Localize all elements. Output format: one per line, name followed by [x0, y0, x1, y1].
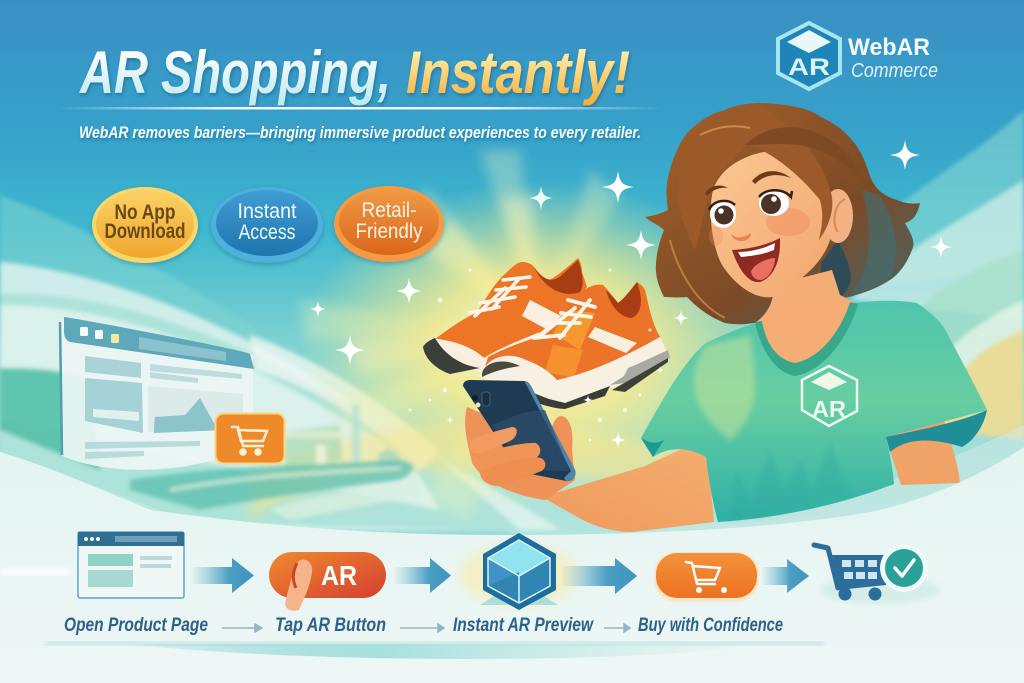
arrow	[562, 558, 637, 594]
cart tile icon	[216, 414, 284, 464]
badge: instant access	[211, 187, 323, 263]
light rays and glow	[250, 150, 780, 520]
sleeve inside	[886, 410, 987, 452]
page body	[61, 319, 253, 470]
step labels: Open Product Page	[64, 615, 208, 636]
t-shirt	[641, 301, 987, 522]
brand logo	[778, 23, 938, 89]
step labels: Buy with Confidence	[638, 615, 783, 636]
page content blocks	[85, 356, 243, 459]
arrow	[192, 558, 254, 593]
address bar	[139, 337, 226, 361]
white lower panel	[0, 447, 1024, 683]
step labels: Instant AR Preview	[453, 615, 594, 636]
hair front	[678, 103, 832, 250]
logo wordmark: WebAR	[848, 34, 930, 61]
title underline	[55, 107, 665, 110]
logo subline: Commerce	[851, 60, 938, 82]
right eye	[759, 190, 792, 216]
small step arrows	[222, 624, 630, 632]
page header bar	[64, 317, 254, 369]
character: excited woman	[542, 103, 987, 532]
city scene behind page	[130, 405, 420, 520]
cheek blush	[766, 208, 810, 236]
step 4 icon: cart button	[654, 552, 759, 602]
back sneaker	[423, 258, 587, 374]
left eyebrow	[705, 186, 728, 196]
step 1 icon: browser	[78, 532, 184, 598]
badge: instant access: Access	[238, 221, 296, 244]
nose	[731, 233, 751, 241]
window dots	[80, 327, 119, 343]
shirt collar	[755, 302, 858, 376]
logo hexagon: AR	[788, 54, 830, 81]
mouth	[732, 238, 780, 282]
neck and chest	[752, 270, 860, 380]
hair dark underside	[821, 240, 851, 300]
badge: retail-friendly: Retail-	[362, 199, 417, 222]
left eye	[709, 200, 736, 228]
badge: retail-friendly: Friendly	[356, 220, 423, 243]
shirt AR logo	[802, 366, 857, 426]
webpage mockup illustration	[60, 317, 254, 470]
left forearm	[542, 438, 714, 532]
right eyebrow	[752, 171, 791, 184]
right arm	[886, 417, 960, 485]
smartphone	[463, 380, 575, 481]
front sneaker	[480, 282, 670, 409]
shirt AR logo: AR	[812, 396, 846, 422]
logo hexagon	[778, 23, 840, 89]
main title: Instantly!	[406, 39, 630, 106]
step labels: Tap AR Button	[275, 615, 386, 636]
shirt shading	[730, 440, 850, 520]
sneakers	[423, 258, 670, 409]
arrow	[395, 558, 451, 593]
page left edge	[60, 322, 62, 455]
step 2 icon: tap AR button: AR	[321, 560, 357, 591]
badge: no app download: No App	[114, 201, 176, 224]
sparkles	[310, 140, 952, 448]
glitter dots	[408, 268, 652, 442]
badge: no app download	[92, 187, 198, 263]
arrow	[762, 559, 809, 593]
bottom bar	[45, 642, 825, 659]
hand behind phone	[465, 407, 575, 500]
subtitle: WebAR removes barriers—bringing immersive product experiences to every retailer.	[79, 123, 641, 142]
lower pale sweep	[0, 425, 1024, 683]
badge: retail-friendly	[334, 186, 444, 262]
badge: instant access: Instant	[238, 200, 297, 223]
step labels	[64, 615, 783, 636]
workflow band	[0, 568, 70, 576]
face	[711, 150, 832, 297]
badge: no app download: Download	[104, 220, 186, 243]
ear	[823, 189, 853, 243]
main title: AR Shopping,	[78, 39, 391, 106]
step 2 icon: tap AR button	[269, 552, 386, 611]
fingers on phone	[469, 427, 545, 486]
step 5 icon: cart with check	[814, 544, 940, 604]
background waves	[0, 110, 1024, 560]
step 3 icon: AR cube	[459, 533, 579, 610]
hair back	[645, 103, 920, 324]
